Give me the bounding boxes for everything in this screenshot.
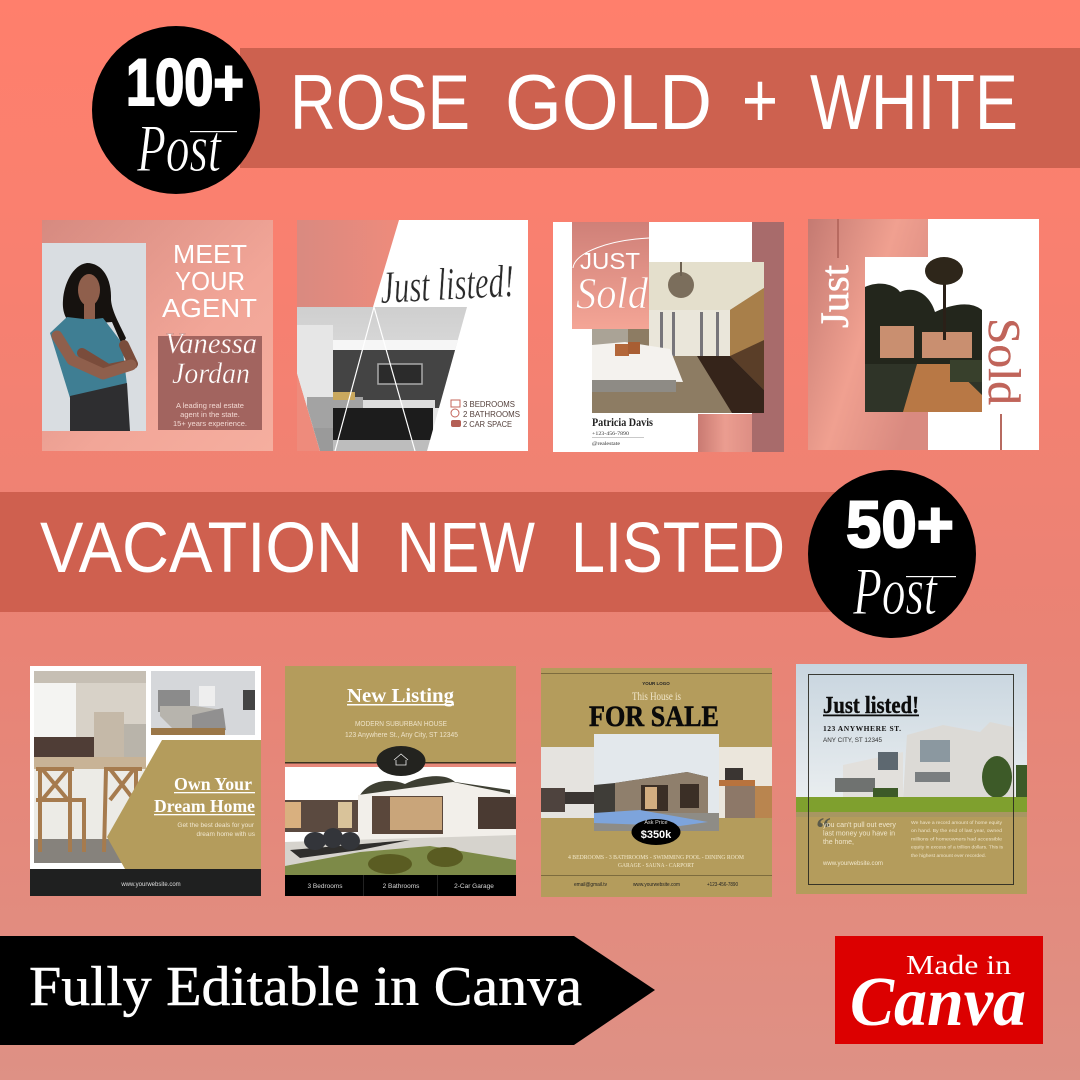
banner title: GOLD	[505, 58, 712, 146]
contact row: www.yourwebsite.com	[633, 882, 680, 888]
agent name card: 15+ years experience.	[173, 419, 247, 428]
banner title: WHITE	[810, 58, 1018, 146]
address: 123 ANYWHERE ST.	[823, 724, 901, 733]
feature bar: 3 Bedrooms	[307, 883, 343, 890]
badge number: 100+	[126, 45, 244, 119]
quote text: you can't pull out every	[823, 822, 896, 829]
post preview: own your dream home	[30, 666, 261, 896]
icon: home badge	[376, 746, 426, 776]
contact details	[592, 417, 653, 447]
top banner: rose gold + white	[240, 48, 1080, 168]
heading: Just listed!	[823, 693, 919, 719]
bottom gradient block	[698, 414, 752, 452]
price badge	[632, 819, 680, 845]
heading: YOUR	[175, 266, 245, 296]
feature bar: 2 Bathrooms	[383, 883, 420, 890]
contact row: email@gmail.tv	[574, 882, 607, 888]
heading: Dream Home	[154, 796, 255, 816]
features text: GARAGE - SAUNA - CARPORT	[618, 863, 694, 869]
banner title: NEW	[397, 509, 535, 588]
post preview: just sold bedroom	[553, 222, 784, 452]
quote text	[822, 822, 896, 867]
banner title: ROSE	[290, 58, 470, 146]
garden photo	[865, 257, 982, 412]
post preview: meet your agent	[42, 220, 273, 451]
post preview: new listing	[285, 666, 516, 896]
post preview: just listed villa: ANY CITY, ST 12345	[823, 737, 882, 744]
agent name card: Jordan	[172, 357, 250, 390]
banner title: VACATION	[40, 509, 363, 588]
logo text: YOUR LOGO	[642, 681, 670, 686]
footer bar: www.yourwebsite.com	[120, 882, 181, 888]
gradient corner	[297, 220, 399, 307]
quote text: the home,	[823, 839, 854, 846]
heading: FOR SALE	[589, 700, 719, 733]
features text	[568, 855, 745, 869]
heading: Own Your	[174, 774, 252, 794]
banner text: Fully Editable in Canva	[29, 956, 582, 1018]
agent photo	[42, 243, 146, 431]
description	[177, 822, 256, 838]
features list: 2 BATHROOMS	[463, 410, 520, 419]
villa photo	[796, 664, 1027, 817]
description: We have a record amount of home equity	[911, 820, 1003, 826]
heading: AGENT	[162, 293, 257, 323]
quote text: www.yourwebsite.com	[822, 860, 883, 867]
features list	[451, 400, 520, 429]
subheading: This House is	[632, 689, 681, 703]
features list: 2 CAR SPACE	[463, 420, 512, 429]
badge: 50+ post	[808, 470, 976, 638]
agent name card	[158, 327, 262, 430]
post preview: for sale	[541, 668, 772, 897]
banner title	[290, 56, 1018, 146]
arrow banner: fully editable in canva	[0, 936, 655, 1045]
vertical lines	[837, 219, 839, 258]
subtitle	[345, 721, 458, 739]
description: millions of homeowners had accessible	[911, 836, 1002, 842]
made in canva badge	[835, 936, 1043, 1044]
kitchen photo	[34, 671, 146, 863]
description: on hand. By the end of last year, owned	[911, 828, 1002, 834]
contact details: Patricia Davis	[592, 417, 653, 429]
heading: MEET	[173, 239, 247, 269]
description: Get the best deals for your	[177, 822, 255, 829]
agent name card: Vanessa	[165, 327, 257, 360]
gradient title square: Sold	[576, 269, 649, 318]
interior photo	[297, 307, 469, 451]
quote mark: “	[816, 812, 831, 845]
post preview: just sold garden	[808, 219, 1039, 450]
banner title: +	[742, 56, 778, 144]
description: equity in excess of a trillion dollars. This is	[911, 844, 1004, 850]
feature bar	[285, 875, 516, 896]
badge logo word: Canva	[850, 964, 1026, 1041]
rotated word: sold: Sold	[979, 318, 1030, 405]
house photo	[594, 734, 719, 831]
agent name card: A leading real estate	[176, 401, 244, 410]
gradient title square	[572, 222, 649, 329]
badge word: Post	[852, 553, 938, 629]
contact row	[574, 882, 738, 888]
banner title: LISTED	[571, 509, 785, 588]
contact row: +123-456-7890	[707, 882, 738, 888]
right stripe	[752, 222, 784, 452]
contact details: @realestate	[592, 441, 621, 447]
banner title	[40, 509, 785, 588]
bedroom photo	[592, 262, 764, 413]
quote text: last money you have in	[823, 830, 895, 838]
feature bar: 2-Car Garage	[454, 883, 494, 890]
footer bar	[30, 869, 261, 896]
side photos	[541, 747, 772, 818]
house photo	[285, 767, 516, 875]
description	[911, 820, 1004, 859]
thin frame	[808, 674, 1014, 884]
badge number: 50+	[846, 487, 954, 561]
features list: 3 BEDROOMS	[463, 400, 515, 409]
triangle outline	[335, 307, 415, 451]
script heading: Just listed!	[379, 255, 515, 313]
agent name card: agent in the state.	[180, 410, 240, 419]
rotated word: just: Just	[812, 265, 857, 328]
heading	[162, 239, 257, 323]
features text: 4 BEDROOMS - 3 BATHROOMS - SWIMMING POOL - DINING ROOM	[568, 855, 745, 861]
contact details: +123-456-7890	[592, 431, 629, 437]
middle banner: vacation new listed	[0, 492, 840, 612]
badge small text: Made in	[906, 950, 1012, 980]
bedroom photo	[151, 671, 255, 735]
heading: New Listing	[347, 685, 454, 707]
heading	[154, 774, 255, 816]
description: the highest amount ever recorded.	[911, 853, 986, 859]
subtitle: MODERN SUBURBAN HOUSE	[355, 721, 447, 728]
description: dream home with us	[196, 831, 256, 838]
tan arrow panel	[107, 740, 261, 869]
badge word: Post	[136, 110, 222, 186]
badge: 100+ post	[92, 26, 260, 194]
post preview: just listed	[297, 220, 528, 451]
price badge: $350k	[641, 829, 672, 841]
post preview: just listed villa	[796, 664, 1027, 894]
gradient title square: JUST	[580, 248, 640, 274]
price badge: Ask Price	[644, 820, 668, 826]
subtitle: 123 Anywhere St., Any City, ST 12345	[345, 732, 458, 739]
